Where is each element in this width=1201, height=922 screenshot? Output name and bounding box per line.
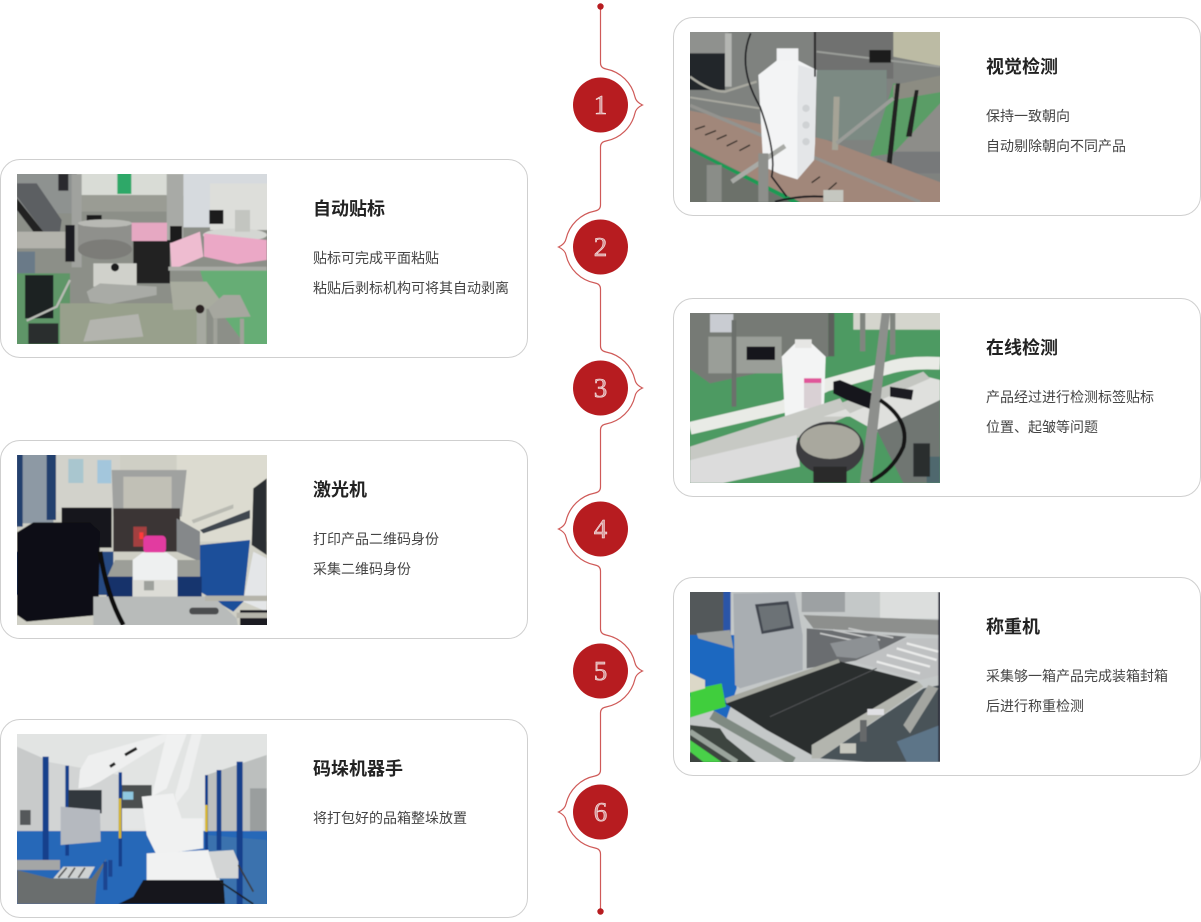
description: 粘贴后剥标机构可将其自动剥离 bbox=[313, 280, 509, 296]
step 6 badge: 6 bbox=[594, 797, 607, 827]
description: 保持一致朝向 bbox=[986, 108, 1070, 124]
photo: palletizing robot bbox=[17, 734, 267, 904]
description bbox=[313, 250, 509, 296]
step 3 badge bbox=[573, 360, 628, 416]
description bbox=[313, 531, 439, 577]
description: 采集二维码身份 bbox=[313, 561, 411, 577]
step 1 badge: 1 bbox=[594, 90, 607, 120]
top dot bbox=[597, 3, 604, 10]
bottom dot bbox=[597, 908, 604, 915]
photo: online inspection bbox=[690, 313, 940, 483]
heading: 激光机 bbox=[313, 480, 367, 500]
description: 后进行称重检测 bbox=[986, 698, 1084, 714]
step 4 badge bbox=[573, 502, 628, 556]
panel: 视觉检测 bbox=[673, 17, 1201, 216]
step 6 badge bbox=[573, 784, 628, 840]
step 2 badge: 2 bbox=[594, 232, 607, 262]
heading: 视觉检测 bbox=[986, 57, 1058, 77]
step 1 badge bbox=[573, 78, 628, 132]
description bbox=[986, 108, 1126, 154]
step 5 badge bbox=[573, 644, 628, 698]
panel: 激光机 bbox=[0, 440, 528, 639]
description: 打印产品二维码身份 bbox=[313, 531, 439, 547]
description: 产品经过进行检测标签贴标 bbox=[986, 389, 1154, 405]
description bbox=[986, 389, 1154, 435]
photo: labelling machine bbox=[17, 174, 267, 344]
timeline line bbox=[558, 6, 642, 911]
description: 自动剔除朝向不同产品 bbox=[986, 138, 1126, 154]
description: 位置、起皱等问题 bbox=[986, 419, 1098, 435]
panel: 自动贴标 bbox=[0, 159, 528, 358]
panel: 码垛机器手 bbox=[0, 719, 528, 918]
panel: 在线检测 bbox=[673, 298, 1201, 497]
step 2 badge bbox=[573, 220, 628, 274]
description: 采集够一箱产品完成装箱封箱 bbox=[986, 668, 1168, 684]
description bbox=[986, 668, 1168, 714]
step 5 badge: 5 bbox=[594, 656, 607, 686]
description: 贴标可完成平面粘贴 bbox=[313, 250, 439, 266]
panel: 称重机 bbox=[673, 577, 1201, 776]
heading: 称重机 bbox=[986, 617, 1040, 637]
description: 将打包好的品箱整垛放置 bbox=[313, 810, 467, 826]
photo: bottle inspection bbox=[690, 32, 940, 202]
photo: laser machine bbox=[17, 455, 267, 625]
heading: 在线检测 bbox=[986, 338, 1058, 358]
step 4 badge: 4 bbox=[594, 514, 608, 544]
heading: 自动贴标 bbox=[313, 199, 385, 219]
heading: 码垛机器手 bbox=[313, 759, 403, 779]
photo: checkweigher bbox=[690, 592, 940, 762]
step 3 badge: 3 bbox=[594, 373, 607, 403]
